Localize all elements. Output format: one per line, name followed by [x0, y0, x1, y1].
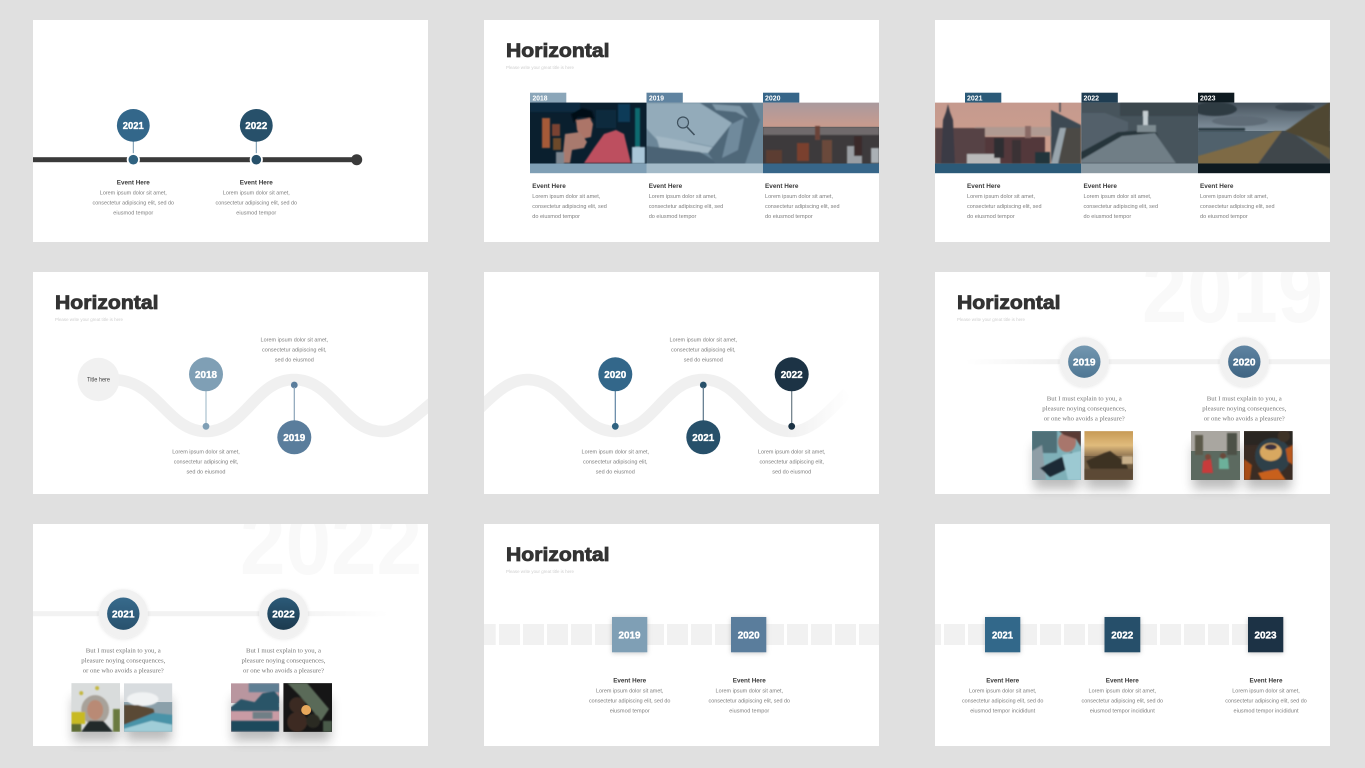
- description 2020: But I must explain to you, a: [1207, 396, 1282, 402]
- event text 2022: consectetur adipiscing elit, sed do: [216, 200, 297, 206]
- event text 2018: do eiusmod tempor: [532, 214, 580, 220]
- callout text 2019: consectetur adipiscing elit,: [262, 348, 327, 354]
- event text 2021: do eiusmod tempor: [967, 214, 1015, 220]
- photo: candle and pine cones: [283, 683, 332, 732]
- timeline track: [33, 611, 389, 616]
- milestone 2020: 2020: [1233, 358, 1256, 368]
- event text 2023: consectetur adipiscing elit, sed do: [1225, 698, 1307, 704]
- colour bar 2022: [1081, 164, 1198, 173]
- panel: ringed timeline 2019-2020: [935, 272, 1330, 495]
- photo: man in pink shirt: [530, 102, 646, 164]
- panel card: [935, 524, 1330, 746]
- event text 2021: Event Here: [117, 180, 150, 186]
- event text 2021: Lorem ipsum dolor sit amet,: [969, 688, 1037, 694]
- panel: wave timeline 2018-2019: [33, 272, 435, 494]
- event text 2022: [1082, 678, 1163, 714]
- year tab 2020: 2020: [765, 95, 781, 102]
- event text 2023: consectetur adipiscing elit, sed: [1200, 204, 1274, 210]
- callout text 2018: consectetur adipiscing elit,: [174, 460, 239, 466]
- panel: block timeline 2019-2020: [484, 524, 879, 746]
- timeline track: [965, 359, 1330, 364]
- event text 2023: do eiusmod tempor: [1200, 214, 1248, 220]
- milestone 2021: 2021: [123, 121, 144, 132]
- event text 2023: Lorem ipsum dolor sit amet,: [1232, 688, 1300, 694]
- event text 2021: Event Here: [986, 678, 1020, 684]
- event text 2022: Event Here: [1084, 183, 1117, 190]
- photo: wave on rock: [124, 683, 172, 732]
- photo: lighthouse on cliff: [1081, 102, 1198, 164]
- heading: Horizontal: [506, 544, 610, 566]
- callout text 2022: sed do eiusmod: [772, 469, 811, 475]
- heading: Horizontal: [506, 40, 610, 62]
- heading: Horizontal: [55, 292, 158, 314]
- event text 2021: eiusmod tempor incididunt: [970, 708, 1036, 714]
- milestone 2022: [240, 109, 273, 166]
- event text 2020: eiusmod tempor: [729, 708, 769, 714]
- panel card: [484, 20, 879, 242]
- photo: coastal road under clouds: [1198, 102, 1330, 164]
- milestone 2018: 2018: [195, 370, 217, 381]
- event text 2023: Lorem ipsum dolor sit amet,: [1200, 194, 1268, 200]
- description 2021: But I must explain to you, a: [86, 648, 161, 654]
- year block 2023: 2023: [1254, 630, 1277, 641]
- event text 2023: Event Here: [1250, 678, 1283, 684]
- wave track: [478, 380, 847, 432]
- milestone 2020: [1220, 337, 1269, 386]
- event text 2021: Event Here: [967, 183, 1001, 190]
- photo: shipwreck at sunset: [1084, 431, 1133, 480]
- event text 2022: Lorem ipsum dolor sit amet,: [1084, 194, 1152, 200]
- description 2022: pleasure noying consequences,: [242, 658, 326, 664]
- event text 2022: consectetur adipiscing elit, sed: [1084, 204, 1158, 210]
- event text 2022: eiusmod tempor incididunt: [1090, 708, 1155, 714]
- milestone 2022: 2022: [245, 121, 268, 132]
- event text 2023: eiusmod tempor incididunt: [1234, 708, 1299, 714]
- milestone 2022: 2022: [272, 610, 295, 620]
- event text 2023: [1200, 183, 1274, 220]
- photo: lake and mountains: [231, 683, 280, 732]
- event text 2018: [532, 183, 607, 220]
- event text 2018: consectetur adipiscing elit, sed: [532, 204, 607, 210]
- timeline bar: [33, 157, 357, 162]
- callout text 2022: consectetur adipiscing elit,: [759, 460, 824, 466]
- event text 2021: Lorem ipsum dolor sit amet,: [100, 190, 167, 196]
- event text 2022: [216, 180, 297, 216]
- panel: ringed timeline 2021-2022: [33, 524, 428, 747]
- callout text 2020: [582, 450, 649, 475]
- subtitle: Please write your great title is here: [506, 569, 574, 574]
- callout text 2020: sed do eiusmod: [596, 469, 635, 475]
- year tab 2023: [1198, 93, 1234, 103]
- event text 2020: Event Here: [765, 183, 799, 190]
- year tab 2022: [1082, 93, 1118, 103]
- start node: [78, 358, 120, 401]
- panel card: [935, 20, 1330, 242]
- description 2020: pleasure noying consequences,: [1202, 406, 1287, 412]
- panel card: [484, 272, 879, 494]
- event text 2021: [962, 678, 1043, 714]
- watermark year: 2019: [1142, 242, 1323, 342]
- callout text 2018: [172, 450, 240, 475]
- year tab 2019: 2019: [649, 95, 664, 102]
- panel: photo timeline 2021-2023: [935, 20, 1330, 242]
- segmented track: [935, 624, 1253, 645]
- year tab 2018: 2018: [532, 95, 548, 102]
- event text 2019: consectetur adipiscing elit, sed do: [589, 698, 670, 704]
- event text 2019: Lorem ipsum dolor sit amet,: [596, 688, 664, 694]
- description 2022: or one who avoids a pleasure?: [243, 668, 324, 674]
- panel: wave timeline 2020-2022: [478, 272, 879, 494]
- colour bar 2020: [763, 164, 879, 173]
- year tab 2019: [646, 93, 683, 103]
- description 2022: [242, 648, 326, 674]
- event text 2020: consectetur adipiscing elit, sed do: [709, 698, 790, 704]
- heading: Horizontal: [957, 292, 1060, 314]
- event text 2022: eiusmod tempor: [236, 210, 276, 216]
- panel card: [33, 20, 428, 242]
- callout text 2021: Lorem ipsum dolor sit amet,: [670, 338, 737, 344]
- event text 2022: Event Here: [1106, 678, 1139, 684]
- year block 2022: 2022: [1111, 630, 1134, 641]
- milestone 2018: [189, 357, 223, 430]
- event text 2019: [589, 678, 670, 714]
- milestone 2022: [775, 357, 809, 430]
- milestone 2019: 2019: [1073, 358, 1096, 368]
- year block 2020: 2020: [738, 630, 760, 641]
- event text 2021: consectetur adipiscing elit, sed do: [962, 698, 1043, 704]
- event text 2018: Event Here: [532, 183, 566, 190]
- photo: couple in a field: [1191, 431, 1240, 480]
- callout text 2018: Lorem ipsum dolor sit amet,: [172, 450, 240, 456]
- event text 2021: [967, 183, 1042, 220]
- subtitle: Please write your great title is here: [957, 317, 1025, 322]
- year tab 2020: [763, 93, 799, 103]
- milestone 2021: [686, 382, 720, 454]
- year tab 2021: 2021: [967, 95, 983, 102]
- subtitle: Please write your great title is here: [506, 65, 574, 70]
- panel card: [33, 524, 428, 746]
- milestone 2021: [99, 589, 148, 638]
- year block 2020: [731, 617, 766, 652]
- year block 2023: [1248, 617, 1283, 652]
- event text 2020: [709, 678, 790, 714]
- year block 2021: 2021: [992, 630, 1013, 641]
- panel card: [33, 272, 428, 494]
- photo: magnifier on desk: [646, 102, 763, 164]
- photo: pancakes on a plate: [1244, 431, 1293, 480]
- callout text 2019: [261, 338, 328, 363]
- callout text 2022: [758, 450, 826, 475]
- description 2020: or one who avoids a pleasure?: [1204, 416, 1285, 422]
- event text 2019: eiusmod tempor: [610, 708, 650, 714]
- milestone 2019: [277, 382, 311, 454]
- timeline end dot: [351, 154, 362, 165]
- description 2021: pleasure noying consequences,: [81, 658, 166, 664]
- milestone 2020: [598, 357, 632, 430]
- event text 2021: Lorem ipsum dolor sit amet,: [967, 194, 1035, 200]
- description 2020: [1202, 396, 1287, 422]
- year tab 2018: [530, 93, 566, 103]
- callout text 2019: sed do eiusmod: [275, 357, 314, 363]
- colour bar 2018: [530, 164, 646, 173]
- event text 2022: do eiusmod tempor: [1084, 214, 1131, 220]
- event text 2021: consectetur adipiscing elit, sed do: [93, 200, 174, 206]
- event text 2021: consectetur adipiscing elit, sed: [967, 204, 1042, 210]
- event text 2019: [649, 183, 723, 220]
- panel: photo timeline 2018-2020: [484, 20, 879, 242]
- start node: Title here: [87, 378, 111, 384]
- event text 2022: consectetur adipiscing elit, sed do: [1082, 698, 1163, 704]
- event text 2021: eiusmod tempor: [113, 210, 153, 216]
- year tab 2021: [965, 93, 1001, 103]
- panel: block timeline 2021-2023: [935, 524, 1330, 746]
- colour bar 2021: [935, 164, 1081, 173]
- year tab 2023: 2023: [1200, 95, 1216, 102]
- milestone 2021: [117, 109, 150, 166]
- event text 2020: [765, 183, 840, 220]
- photo: woman reading magazine: [1032, 431, 1081, 480]
- photo shadows 2020: [1193, 446, 1291, 489]
- milestone 2022: [259, 589, 308, 638]
- event text 2018: Lorem ipsum dolor sit amet,: [532, 194, 601, 200]
- panel: timeline line 2021-2022: [33, 20, 428, 242]
- photo shadows 2021: [73, 698, 171, 741]
- description 2019: But I must explain to you, a: [1047, 396, 1122, 402]
- event text 2019: do eiusmod tempor: [649, 214, 697, 220]
- colour bar 2023: [1198, 164, 1330, 173]
- photo: woman among flowers: [71, 683, 120, 732]
- watermark year: 2022: [240, 494, 422, 594]
- event text 2019: Event Here: [649, 183, 683, 190]
- event text 2019: consectetur adipiscing elit, sed: [649, 204, 723, 210]
- milestone 2022: 2022: [781, 370, 803, 381]
- callout text 2021: consectetur adipiscing elit,: [671, 348, 736, 354]
- event text 2019: Lorem ipsum dolor sit amet,: [649, 194, 717, 200]
- description 2022: But I must explain to you, a: [246, 648, 321, 654]
- callout text 2020: Lorem ipsum dolor sit amet,: [582, 450, 649, 456]
- event text 2022: Lorem ipsum dolor sit amet,: [1089, 688, 1156, 694]
- callout text 2020: consectetur adipiscing elit,: [583, 460, 648, 466]
- description 2019: pleasure noying consequences,: [1042, 406, 1127, 412]
- panel card: [935, 272, 1330, 494]
- event text 2020: do eiusmod tempor: [765, 214, 813, 220]
- event text 2020: Lorem ipsum dolor sit amet,: [765, 194, 833, 200]
- year block 2019: 2019: [618, 630, 641, 641]
- event text 2020: Lorem ipsum dolor sit amet,: [716, 688, 783, 694]
- callout text 2021: [670, 338, 737, 363]
- callout text 2019: Lorem ipsum dolor sit amet,: [261, 338, 328, 344]
- milestone 2020: 2020: [604, 370, 627, 381]
- event text 2023: [1225, 678, 1307, 714]
- callout text 2018: sed do eiusmod: [186, 469, 226, 475]
- event text 2021: [93, 180, 174, 216]
- milestone 2021: 2021: [692, 433, 715, 444]
- event text 2022: Lorem ipsum dolor sit amet,: [223, 190, 290, 196]
- milestone 2019: 2019: [283, 433, 306, 444]
- event text 2022: Event Here: [240, 180, 273, 186]
- year block 2019: [612, 617, 647, 652]
- event text 2019: Event Here: [613, 678, 647, 684]
- segmented track: [484, 624, 879, 645]
- colour bar 2019: [646, 164, 763, 173]
- photo: city at dusk: [763, 102, 879, 164]
- event text 2022: [1084, 183, 1158, 220]
- wave track: [112, 380, 435, 432]
- photo shadows 2019: [1034, 446, 1131, 489]
- event text 2020: Event Here: [733, 678, 766, 684]
- milestone 2021: 2021: [112, 610, 135, 620]
- subtitle: Please write your great title is here: [55, 317, 123, 322]
- description 2019: [1042, 396, 1127, 422]
- year tab 2022: 2022: [1084, 95, 1099, 102]
- event text 2020: consectetur adipiscing elit, sed: [765, 204, 840, 210]
- photo shadows 2022: [233, 698, 330, 741]
- callout text 2021: sed do eiusmod: [684, 357, 723, 363]
- description 2021: or one who avoids a pleasure?: [83, 668, 164, 674]
- year block 2021: [985, 617, 1020, 652]
- description 2021: [81, 648, 166, 674]
- event text 2023: Event Here: [1200, 183, 1234, 190]
- panel card: [484, 524, 879, 746]
- milestone 2019: [1060, 337, 1109, 386]
- photo: skyline at sunset: [935, 102, 1082, 164]
- year block 2022: [1104, 617, 1140, 652]
- description 2019: or one who avoids a pleasure?: [1044, 416, 1125, 422]
- callout text 2022: Lorem ipsum dolor sit amet,: [758, 450, 826, 456]
